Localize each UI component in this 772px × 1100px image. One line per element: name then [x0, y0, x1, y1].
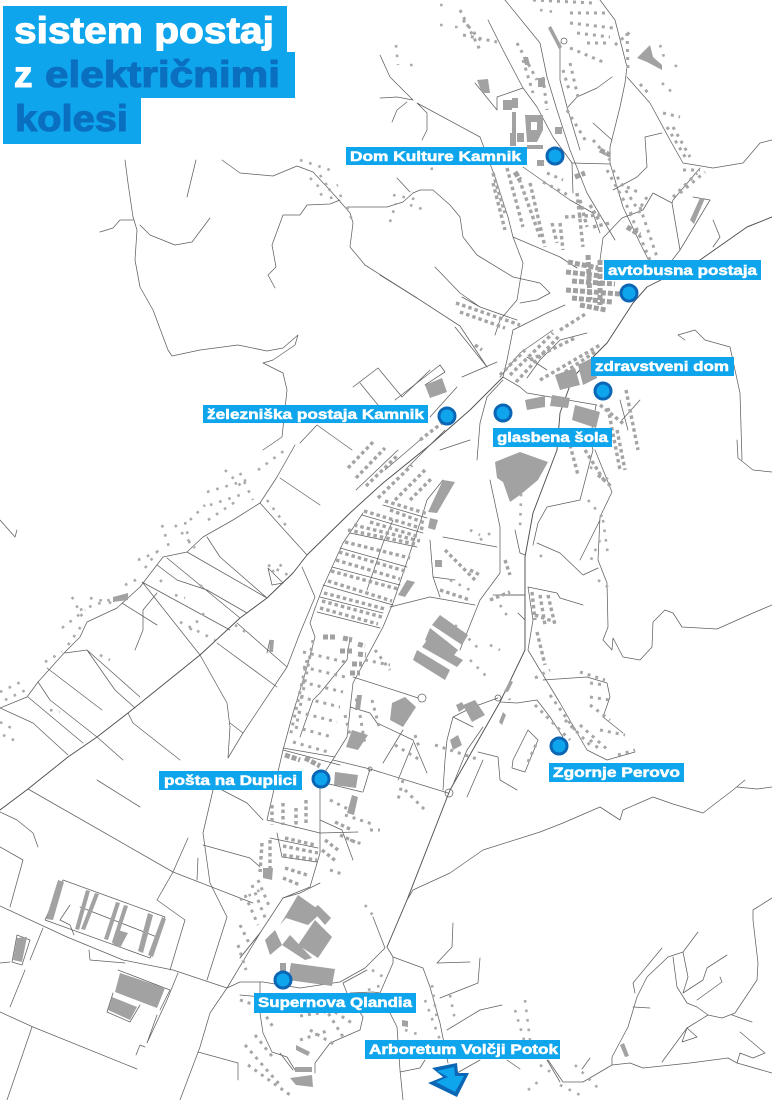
label: Arboretum Volčji Potok: Arboretum Volčji Potok — [369, 1041, 558, 1057]
station: pošta na Duplici: pošta na Duplici — [164, 772, 297, 788]
station: Zgornje Perovo: Zgornje Perovo — [553, 764, 680, 780]
title line: kolesi: kolesi — [15, 98, 128, 139]
station: avtobusna postaja: avtobusna postaja — [608, 262, 757, 278]
station: pošta na Duplici — [159, 771, 329, 790]
station: avtobusna postaja — [604, 260, 761, 301]
station: zdravstveni dom: zdravstveni dom — [595, 358, 729, 374]
arrow: towards Arboretum — [428, 1063, 469, 1097]
station: glasbena šola: glasbena šola — [497, 429, 608, 445]
title word: električnimi: električnimi — [45, 54, 280, 95]
station: Supernova Qlandia — [254, 972, 416, 1013]
station: Zgornje Perovo — [549, 738, 684, 782]
station: železniška postaja Kamnik: železniška postaja Kamnik — [207, 406, 424, 422]
title background — [3, 6, 295, 144]
station: glasbena šola — [493, 405, 612, 447]
title — [3, 6, 295, 144]
title line: sistem postaj: sistem postaj — [14, 10, 274, 51]
station: železniška postaja Kamnik — [203, 405, 455, 424]
station: Dom Kulture Kamnik: Dom Kulture Kamnik — [350, 148, 521, 164]
label: Arboretum Volčji Potok — [365, 1040, 560, 1059]
title line: z: z — [14, 54, 32, 95]
station: zdravstveni dom — [591, 357, 734, 399]
station: Supernova Qlandia: Supernova Qlandia — [258, 994, 412, 1010]
station: Dom Kulture Kamnik — [346, 147, 563, 165]
